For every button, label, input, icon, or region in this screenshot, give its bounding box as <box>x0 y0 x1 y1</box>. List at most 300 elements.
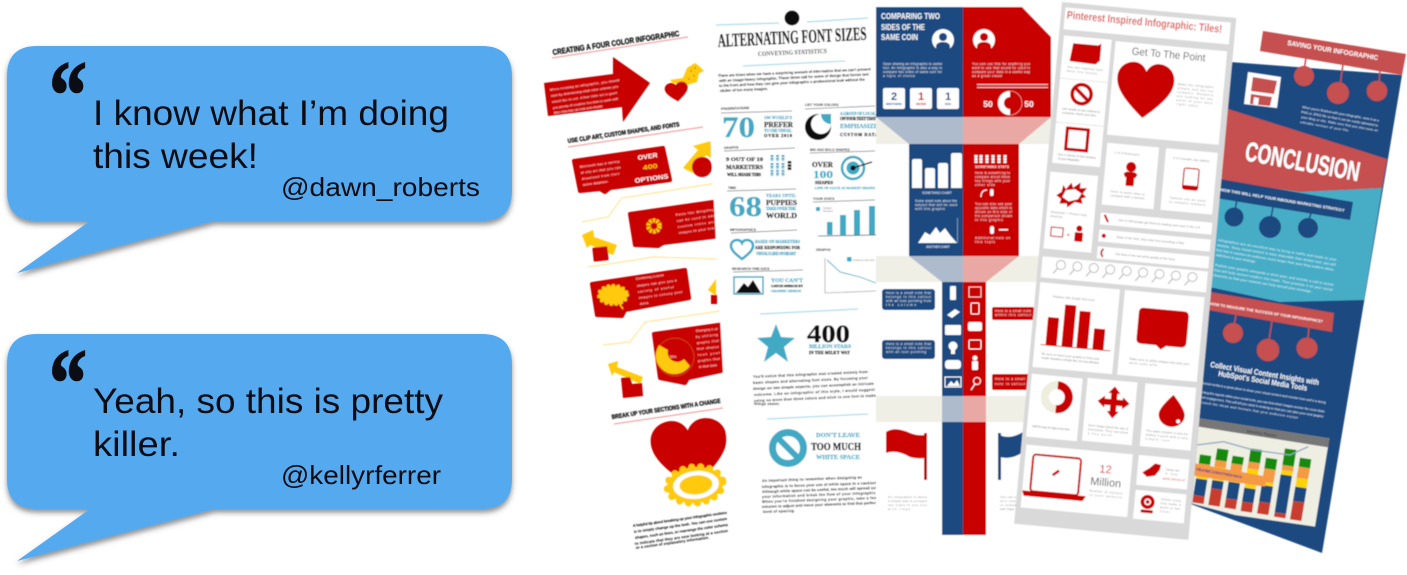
body text: is to simply change up the look. You can use custom <box>634 517 728 534</box>
stat: circle crescent: A GROUP OF LOCAL <box>840 112 876 116</box>
stat: 70: PRESENTATIONS <box>721 106 750 111</box>
tile: get to the point: simple and not too <box>1177 86 1214 93</box>
red callout 1: within this callout <box>995 313 1031 317</box>
tile: get to the point: Get To The Point <box>1131 46 1206 64</box>
red mid content: this topic <box>975 240 995 244</box>
quote text: this week! <box>93 137 258 176</box>
red callout 2: Here is a small <box>995 377 1025 381</box>
stat: circle crescent: CUSTOM DATA <box>840 132 878 137</box>
speech bubble: kellyrferrer quote <box>7 330 512 561</box>
donut: 50 50: 50 <box>1024 99 1034 109</box>
panel: pinterest inspired tiles <box>1014 2 1236 540</box>
chart: blue bars <box>813 197 876 236</box>
red mid block <box>963 144 1019 256</box>
icon: yellow arrow and red square <box>582 230 617 262</box>
tile: splat: display <box>1050 214 1063 219</box>
tile: bar chart: Be sure to insert your graphs to help your <box>1042 352 1100 361</box>
tile: drop: The water droplet in this tile <box>1146 429 1188 436</box>
tile: splat: Character + Person may <box>1051 210 1087 217</box>
callout: flower: custom icons and <box>678 220 716 229</box>
bar chart: white <box>912 153 962 188</box>
body text: When you're finished designing your graphic, take a few <box>762 496 877 504</box>
callout: cloud tree: images to convey your <box>639 290 684 300</box>
heading: break up sections: BREAK UP YOUR SECTIONS WITH A CHANGE <box>611 398 721 421</box>
tile: get to the point: point of your data <box>1176 98 1213 105</box>
stat: 68: PUPPIES <box>766 199 797 207</box>
body text: outcome. Like an infographic of this style, I would suggest <box>754 388 876 397</box>
chart: blue line <box>816 248 876 293</box>
tile: webcam <box>1133 490 1186 523</box>
stat card: 1 red <box>910 88 932 109</box>
stat: over 100 shapes: BIG AND BOLD SHAPES <box>810 148 850 152</box>
tile: person: 1 in 3 Americans <box>1114 150 1140 157</box>
stat: heart outline: BASED ON MARKETERS <box>755 240 800 244</box>
red circles bottom <box>1224 315 1317 361</box>
title: ALTERNATING FONT SIZES <box>717 24 867 52</box>
quote text: Yeah, so this is pretty <box>93 382 444 421</box>
tile stack: icons: Get a variety of tiles shapes <box>1058 152 1097 160</box>
stat: 68: 68 <box>729 191 762 223</box>
subtitle: CONVEYING STATISTICS <box>758 48 827 58</box>
stat: 400 <box>807 321 851 355</box>
tile: person: compare with a person <box>1110 193 1145 200</box>
chart: blue bars: Statistic <box>823 207 833 210</box>
tile: person <box>1102 143 1159 209</box>
callout: flower: images to your text <box>679 226 715 235</box>
red arrow callout: When creating an infographic, you should <box>550 78 620 92</box>
flag caption: red: a simple way to compare <box>888 499 927 503</box>
collage of infographic thumbnails <box>544 0 1406 560</box>
blue intro text: a topic of choice <box>883 74 915 78</box>
navy text: Social media is a great place to share your visual content and monitor how well it is doing <box>1202 381 1326 405</box>
blue callout 2: Here is a small note that <box>886 342 931 346</box>
stat: heart outline: VISUALS LIKE ON HEART <box>756 252 796 256</box>
stat: 70: 100 WORLD'S <box>764 115 793 120</box>
title tile: Pinterest Inspired Infographic: Tiles! <box>1066 10 1223 36</box>
blue header block <box>876 7 963 117</box>
blue callout 2: belongs in this callout <box>886 346 931 350</box>
stat card: 2: BROTHERS <box>886 102 902 106</box>
panel: alternating font sizes <box>703 0 880 560</box>
beige bands <box>876 117 1052 422</box>
blue intro text: tool. An infographic is also a way to <box>883 66 942 70</box>
navy circles <box>1225 200 1318 238</box>
red arrow callout: start by determining what color scheme you <box>551 85 619 98</box>
strip rows: The lines in the red refers quality of the hires <box>1115 252 1176 261</box>
stat: 70: 70 <box>722 111 755 144</box>
heading: SAME COIN <box>881 32 918 42</box>
body text: infographic is to focus your use of white space in a cautious <box>762 481 877 489</box>
stat: 70: TO USE VISUAL <box>764 128 792 133</box>
black dot ornament <box>784 10 800 26</box>
body text: shapes, such as lines, or rearrange the color scheme <box>635 523 728 540</box>
body text: You'll notice that this infographic was created entirely from <box>753 370 869 379</box>
intro text: clutter of too many images. <box>720 87 768 93</box>
teal text: that will help convert readers into leads. Then promote it on your social <box>1214 268 1333 292</box>
tile: speech shape <box>1117 290 1205 382</box>
red mid content: SOMETHING STATS <box>975 165 1009 169</box>
icon: square outline <box>1066 128 1088 151</box>
tile: webcam: clear <box>1160 509 1170 514</box>
flag caption: red: two sides of one coin <box>888 503 927 507</box>
donut <box>656 345 690 374</box>
tile: laptop 12 million: Number of visitors <box>1089 489 1123 496</box>
navy text: around the ideas and formats that your audience enjoys <box>1199 400 1299 420</box>
chart: blue bars: Numbers <box>823 210 834 213</box>
navy text: and engagement. This will tell you what is working so that you can plan your next graphic <box>1200 395 1324 419</box>
save text: When you're finished with your infographic, save it as a <box>1302 105 1380 123</box>
icon: tv plus person <box>1051 227 1063 237</box>
callout: donut chart: took your <box>698 351 721 357</box>
callout: donut chart: in that data <box>699 363 717 369</box>
stat card: 2 <box>883 88 905 109</box>
quotation mark: “ <box>49 42 87 150</box>
tile: drop: simple icon <box>1145 436 1170 443</box>
save text: your blog or site. Make sure that you also save an <box>1301 115 1379 133</box>
red mid content: shown on this side of <box>975 210 1012 214</box>
stat: 70: OVER 2010 <box>764 133 793 138</box>
ribbon: inbound marketing <box>1216 179 1353 220</box>
stat: mountain: GRAPHIC DESIGN <box>771 289 801 293</box>
flag caption: red <box>888 495 927 511</box>
bar chart caption: SOMETHING CHART <box>922 191 952 195</box>
red mid content: the comparison shown <box>975 214 1012 218</box>
tile: splat: + <box>1066 232 1070 239</box>
tile stack: icons: on your infographic <box>1058 156 1080 162</box>
flag caption: blue: this space <box>1000 499 1020 503</box>
icon: target <box>842 157 864 179</box>
callout: flower: Fonts like Wingdings <box>676 207 716 217</box>
callout: donut chart: graphs that <box>697 339 719 345</box>
stat: 400: BILLION STARS <box>809 345 851 350</box>
callout: over 400 options: 400 <box>642 163 659 172</box>
red callout 1: Here is a small note <box>995 309 1031 313</box>
callout: white space: TOO MUCH <box>811 442 861 453</box>
icon: heart outline <box>731 240 753 259</box>
callout: over 400 options: download from their <box>582 172 621 181</box>
callout: flower: can be used to add <box>677 214 715 223</box>
body text: basic shapes and alternating font sizes. By focusing your <box>753 376 868 385</box>
red callout 2: note in callout <box>995 382 1025 386</box>
stat: 9 out of 10: GRAPHS <box>724 145 739 150</box>
stat: 68: YEARS UNTIL <box>766 193 796 198</box>
teal text: Publish your graphic alongside a short post, and include a call to action <box>1215 263 1334 287</box>
callout: cloud tree: data. <box>640 301 650 306</box>
teal text: Add them to your strategy. <box>1216 253 1256 264</box>
stat: mountain <box>732 267 803 294</box>
callout: cloud tree: Combining custom <box>636 273 664 281</box>
stat: 68: TAKE OVER THE <box>766 206 796 211</box>
red arrow callout: More than that can look a bit chaotic. <box>554 104 604 115</box>
blue mid text: with this graphic <box>915 207 945 211</box>
stat card: 1 red: 1 <box>918 91 924 103</box>
tile: laptop 12 million: to your website <box>1089 493 1122 500</box>
stat: over 100 shapes: LINE UP CLICK AS MARKET SHAPES <box>815 186 875 190</box>
red intro text: as a great visual <box>972 74 1002 78</box>
tile: webcam: Utilize icons <box>1161 497 1182 503</box>
red arrow callout <box>544 57 650 122</box>
callout: donut chart <box>654 324 725 383</box>
red intro text: compare your data in a useful way <box>972 70 1030 74</box>
ribbon: inbound marketing: HOW THIS WILL HELP YOUR INBOUND MARKETING STRATEGY <box>1220 187 1345 213</box>
flag caption: red: with flags <box>888 507 910 511</box>
tile: person: Here is some data to <box>1111 189 1145 196</box>
blue callout 2: with an icon pointing <box>886 350 926 354</box>
save text: editable version of your file. <box>1300 120 1350 133</box>
icon: mic and dash <box>990 226 994 234</box>
blue mid text: subject that will be used <box>915 203 957 207</box>
callout: over 400 options: OVER <box>637 152 658 162</box>
intro text <box>718 67 872 93</box>
save text <box>1300 105 1380 133</box>
blue column <box>942 282 963 535</box>
stat: mountain: CATCH SPEECH BY <box>771 284 803 288</box>
icon: curved arrow and mic <box>981 190 987 197</box>
blue callout 1: belongs in this callout <box>886 295 931 299</box>
flag caption: blue: to compare <box>1000 503 1020 507</box>
tile: get to the point: Make the infographic <box>1178 82 1215 89</box>
blue mid text <box>915 199 957 211</box>
blue callout 1 <box>882 289 935 310</box>
tile: get to the point: right away <box>1176 102 1199 108</box>
stat: circle crescent <box>805 103 878 140</box>
body text: or a section of explanatory information. <box>636 536 709 550</box>
tile: drop <box>1140 383 1196 451</box>
tile: webcam: point or two <box>1160 505 1181 511</box>
tile: tablet: Tablets can be used <box>1169 196 1206 203</box>
ribbon: measure success <box>1208 292 1334 332</box>
callout: over 400 options <box>574 148 670 192</box>
red intro text: want to use that would be used to <box>972 66 1030 70</box>
blue intro text <box>883 62 943 78</box>
stat: 400: 400 <box>807 321 850 348</box>
red arrow callout: would like to use. A four color set is given <box>552 91 618 104</box>
stat: 9 out of 10: WILL SHARE THIS <box>727 172 762 177</box>
blue mid block <box>909 144 963 256</box>
blue mid text: Some small note about the <box>915 199 957 203</box>
intro text: to the front and how they can give your infographic a professional look without the <box>719 78 865 88</box>
tile: bird icon: These are <box>1165 467 1180 473</box>
flag caption: blue: You can use <box>1000 495 1020 499</box>
donut: 50 50: 50 <box>983 99 993 109</box>
tile stack: icons: Use simple to use outlines to <box>1062 106 1101 114</box>
red mid content: other side <box>975 183 995 187</box>
flag caption: blue: with flags <box>1000 507 1014 511</box>
icon: blue flag <box>998 432 1023 480</box>
tile: bird icon <box>1136 455 1190 489</box>
strip rows: One in 100 people get hired at reading each year in the U.S <box>1118 218 1200 230</box>
icon: yellow arrow and red L shape <box>608 361 643 398</box>
stat: circle crescent: LIST YOUR COLORS <box>805 103 839 107</box>
blue callout 1: with an icon pointing from <box>886 299 931 303</box>
teal text: website. Since visual content is more shareable than written text, you will <box>1217 243 1336 267</box>
stat card: 1 blue: 1 <box>945 91 951 103</box>
teal text: channels so that your network can help spread your message. <box>1213 273 1312 294</box>
body text: using no more than three colors and stick to one font to make <box>754 394 876 403</box>
callout: donut chart: by utilizing <box>696 333 718 339</box>
callout: over 400 options: OPTIONS <box>634 173 670 185</box>
callout: cloud tree: shapes can give you a <box>637 278 677 288</box>
stat: over 100 shapes: 100 <box>813 170 833 181</box>
tile: speech shape: point come alive <box>1129 361 1158 367</box>
heading: visual content insights: Collect Visual Content Insights with <box>1210 360 1320 387</box>
red arrow callout: you plenty of creative freedom to work with <box>553 97 619 110</box>
red mid content: You can also use your <box>975 202 1013 206</box>
red callout 2 <box>992 374 1032 390</box>
panel: conclusion infographic <box>1180 31 1406 553</box>
mountain chart: ANOTHER CHART <box>926 245 950 249</box>
stacked bar chart: Monthly Report <box>1247 428 1278 438</box>
tile stack: icons: You can organize your <box>1067 65 1103 72</box>
teal text: find that it reaches an audience much larger than your blog readers alone. <box>1216 248 1335 272</box>
red mid content: in this graphic <box>975 218 1003 222</box>
tile: laptop 12 million: Million <box>1090 476 1122 490</box>
attribution: @dawn_roberts <box>281 172 480 202</box>
mountain chart <box>918 218 958 249</box>
teal text <box>1213 238 1338 294</box>
red conclusion band <box>1215 108 1387 192</box>
stat: heart outline: INFOGRAPHICS <box>730 228 757 232</box>
callout: donut chart: Changing it up <box>696 327 718 333</box>
icon: red person <box>973 29 995 51</box>
magnifier row <box>1041 256 1208 292</box>
stat: over 100 shapes: OVER <box>812 160 834 169</box>
callout: white space: DON'T LEAVE <box>816 432 860 439</box>
tile: bar chart <box>1032 282 1120 374</box>
heading: visual content insights: HubSpot's Social Media Tools <box>1218 369 1308 393</box>
icon: prohibited sign <box>772 432 804 464</box>
body text <box>762 475 878 514</box>
tile: four way arrows: Don't forget about the use of <box>1088 423 1129 431</box>
save text: PNG or JPEG file so that it can be easily uploaded to <box>1301 110 1379 128</box>
icon: cube <box>1070 41 1101 65</box>
tile stack: icons: complete charts and tiles <box>1062 110 1096 118</box>
stat: heart outline <box>730 228 800 259</box>
icon: people grid <box>772 155 783 176</box>
red mid content: compare about these <box>975 175 1010 179</box>
red mid content <box>975 155 1013 244</box>
body text: to indicate that they are now looking at a section <box>635 529 729 546</box>
strip rows <box>1097 212 1212 268</box>
icon: blue person <box>932 29 954 51</box>
stat: over 100 shapes: SHAPES <box>815 180 833 185</box>
panel: four color infographic <box>544 29 731 550</box>
icon: laptop <box>1030 454 1081 496</box>
stat: over 100 shapes <box>810 148 875 190</box>
ribbon: measure success: HOW TO MEASURE THE SUCCESS OF YOUR INFOGRAPHICS? <box>1210 301 1324 324</box>
stat: circle crescent: ON YOUR TEXT THAT <box>840 117 876 121</box>
icon: crescent <box>805 114 831 140</box>
stat: circle crescent: EMPHASIZE <box>840 123 878 130</box>
icon: yellow cloud <box>665 464 725 506</box>
body text: Although white space can be useful, too much will spread out <box>762 486 878 494</box>
navy text: Using the reports within your social tools, you can find which images receive the most clicks <box>1201 390 1325 414</box>
tile: get to the point <box>1107 41 1227 145</box>
callout: donut chart: graphic that <box>698 357 720 363</box>
stat: 400: IN THE MILKY WAY <box>809 350 850 355</box>
intro text: with an image-heavy infographic. These times call for some of design that forces text <box>718 72 870 83</box>
quote text: I know what I’m doing <box>93 94 449 133</box>
teal text: Infographics are an excellent way to bring in traffic and leads to your <box>1218 238 1338 262</box>
tooltip <box>1194 463 1267 487</box>
quote text: killer. <box>93 425 180 464</box>
callout: cloud tree <box>592 270 689 316</box>
chart: blue bars: YOUR STATS <box>813 197 835 201</box>
stat: 68: WORLD <box>766 212 797 220</box>
body text: things easier. <box>754 402 780 406</box>
tile: get to the point: complex. Readers <box>1177 90 1214 97</box>
funnel 2 <box>909 256 963 282</box>
stat: 70: PREFER <box>764 120 794 129</box>
tile: bar chart: Replace this Graph Text here <box>1053 294 1095 302</box>
chart: blue line: GRAPHS <box>816 248 831 252</box>
heading: use clip art: USE CLIP ART, CUSTOM SHAPES, AND FONTS <box>567 121 680 145</box>
red column <box>963 282 986 535</box>
body text: design on two simple aspects, you can accomplish an intricate <box>753 382 874 391</box>
icon: arrow fragment <box>708 279 717 304</box>
column icons: blue <box>945 286 961 387</box>
icon: heart <box>1114 60 1176 121</box>
stat: 68: TIME <box>728 186 737 190</box>
red intro text <box>972 62 1030 78</box>
stat: 9 out of 10: 9 OUT OF 10 <box>726 157 763 163</box>
body text: minutes to adjust and move your elements to find that perfect <box>762 501 878 509</box>
callout: white space <box>811 432 861 461</box>
tile: four way arrows <box>1082 378 1138 445</box>
callout: cloud tree: variety of useful <box>638 285 674 294</box>
icon: yellow bird and heart <box>664 63 704 103</box>
tile: donut: Half the way, it's right at the time <box>1032 424 1070 432</box>
stat: 9 out of 10: MARKETERS <box>726 165 764 171</box>
intro text: There are times when we have a surprising amount of information that we can't present <box>718 67 872 78</box>
stat: heart outline: ARE RESPONDING FOR <box>755 246 800 250</box>
tile: bird icon: a few <box>1165 471 1178 477</box>
flag caption: red: An infographic is about <box>888 495 927 499</box>
tile stack: icons <box>1052 35 1112 167</box>
body text <box>633 511 729 550</box>
callout: over 400 options: online database. <box>583 179 609 187</box>
icon: floppy disk <box>1244 72 1281 108</box>
navy background <box>1180 62 1402 553</box>
icon: big heart <box>649 416 731 491</box>
icon: people row <box>976 155 1005 163</box>
stat: mountain: YOU CAN'T <box>771 278 803 284</box>
blue intro text: compare two sides of same coin for <box>883 70 943 74</box>
strip rows: Most of the time, they help from providing a filter <box>1117 235 1185 245</box>
tile: laptop 12 million <box>1021 445 1133 517</box>
stat card: 1 blue: DOG <box>945 102 951 106</box>
tile: splat <box>1043 172 1098 253</box>
callout: donut chart: 50% <box>670 355 677 359</box>
callout: donut chart: that shapes <box>697 345 719 351</box>
icon: flower <box>648 220 660 232</box>
flag caption: blue <box>1000 495 1020 511</box>
stat: mountain: RESEARCH THIS DATA <box>732 267 770 271</box>
callout: white space: WHITE SPACE <box>816 454 860 461</box>
heading: COMPARING TWO <box>881 11 940 21</box>
tile: webcam: that make a <box>1160 501 1181 507</box>
body text: level of spacing. <box>763 509 795 514</box>
red callout 1 <box>992 307 1034 320</box>
tile: speech shape: Make sure to utilize shapes that help your <box>1129 357 1190 366</box>
red mid content: Additional note on <box>975 236 1010 240</box>
red mid content: opposite data which is <box>975 206 1012 210</box>
teal band <box>1200 180 1382 302</box>
red header block <box>963 7 1051 117</box>
title tile <box>1064 7 1231 44</box>
tile: four way arrows: a key point. <box>1087 431 1114 438</box>
donut: 50 50 <box>983 91 1034 115</box>
